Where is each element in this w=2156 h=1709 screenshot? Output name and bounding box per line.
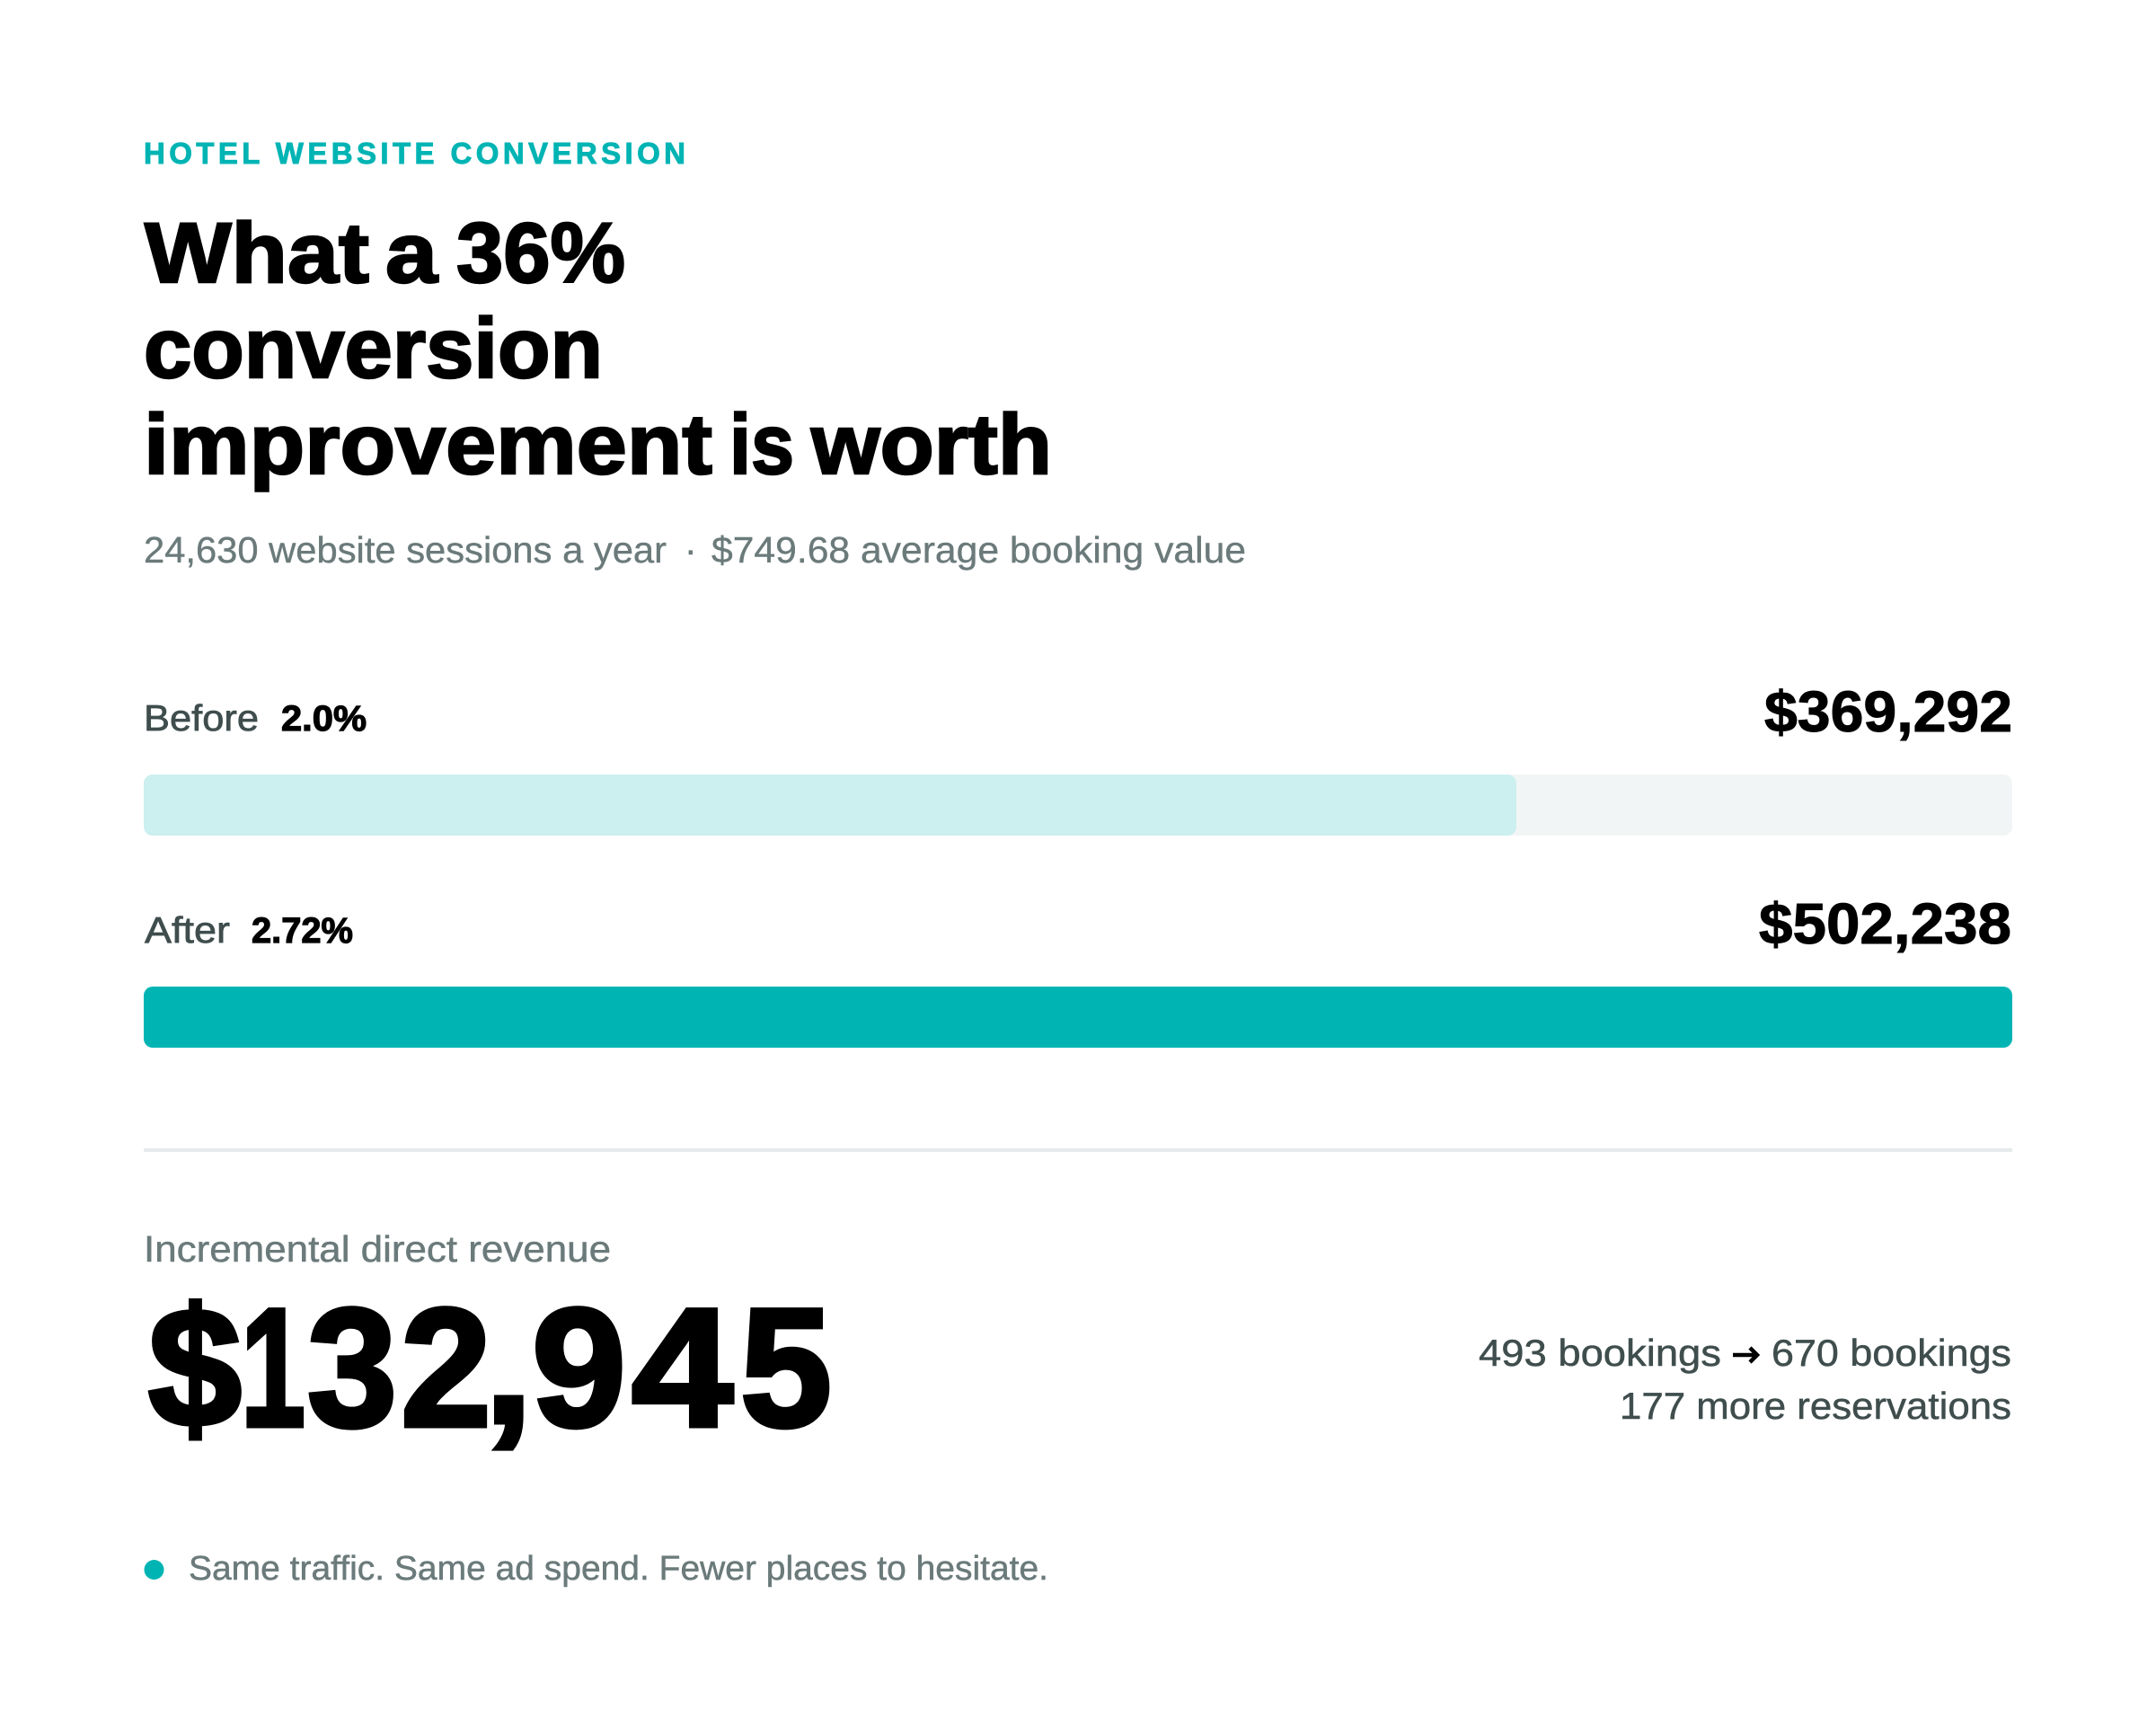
incremental revenue value: 3 [307,1273,397,1462]
subtitle: $749.68 average booking value [711,529,1246,571]
title: is [729,397,794,492]
subtitle: 24,630 website sessions a year [144,529,667,571]
icon: footer dot [144,1560,163,1580]
incremental revenue value [148,1270,832,1462]
bookings comparison: 177 more reservations [1620,1385,2011,1427]
title: worth [810,397,1052,492]
incremental revenue label: Incremental direct revenue [144,1228,611,1270]
title: What [145,206,369,301]
incremental revenue value: 5 [740,1273,832,1462]
title [144,206,1052,492]
title: 36% [456,206,625,301]
bookings comparison: 670 bookings [1772,1332,2011,1374]
after revenue value: $502,238 [1759,891,2011,956]
before row label: Before [144,697,259,739]
incremental revenue value: 9 [532,1273,626,1462]
after row label [145,909,353,951]
eyebrow label: HOTEL WEBSITE CONVERSION [144,137,685,170]
incremental revenue value: $ [148,1273,242,1462]
after row label: 2.72% [252,911,353,951]
before bar [144,775,2012,836]
before row label: 2.0% [281,699,367,739]
subtitle: · [685,529,697,571]
title: improvement [144,397,712,492]
footer note: Same traffic. Same ad spend. Fewer places to hesitate. [189,1550,1048,1588]
title: conversion [144,301,603,396]
before row label [144,697,367,739]
after row label: After [145,909,230,951]
title: a [385,206,438,301]
incremental revenue value: 4 [632,1273,733,1462]
subtitle [144,529,1246,571]
incremental revenue value: 2 [401,1273,491,1462]
icon: arrow [1733,1348,1757,1362]
after bar [144,987,2012,1048]
before revenue value: $369,292 [1764,679,2012,744]
incremental revenue value: , [484,1270,533,1458]
bookings comparison [1479,1332,2011,1427]
bookings comparison: 493 bookings [1479,1332,1721,1374]
incremental revenue value: 1 [241,1273,305,1462]
